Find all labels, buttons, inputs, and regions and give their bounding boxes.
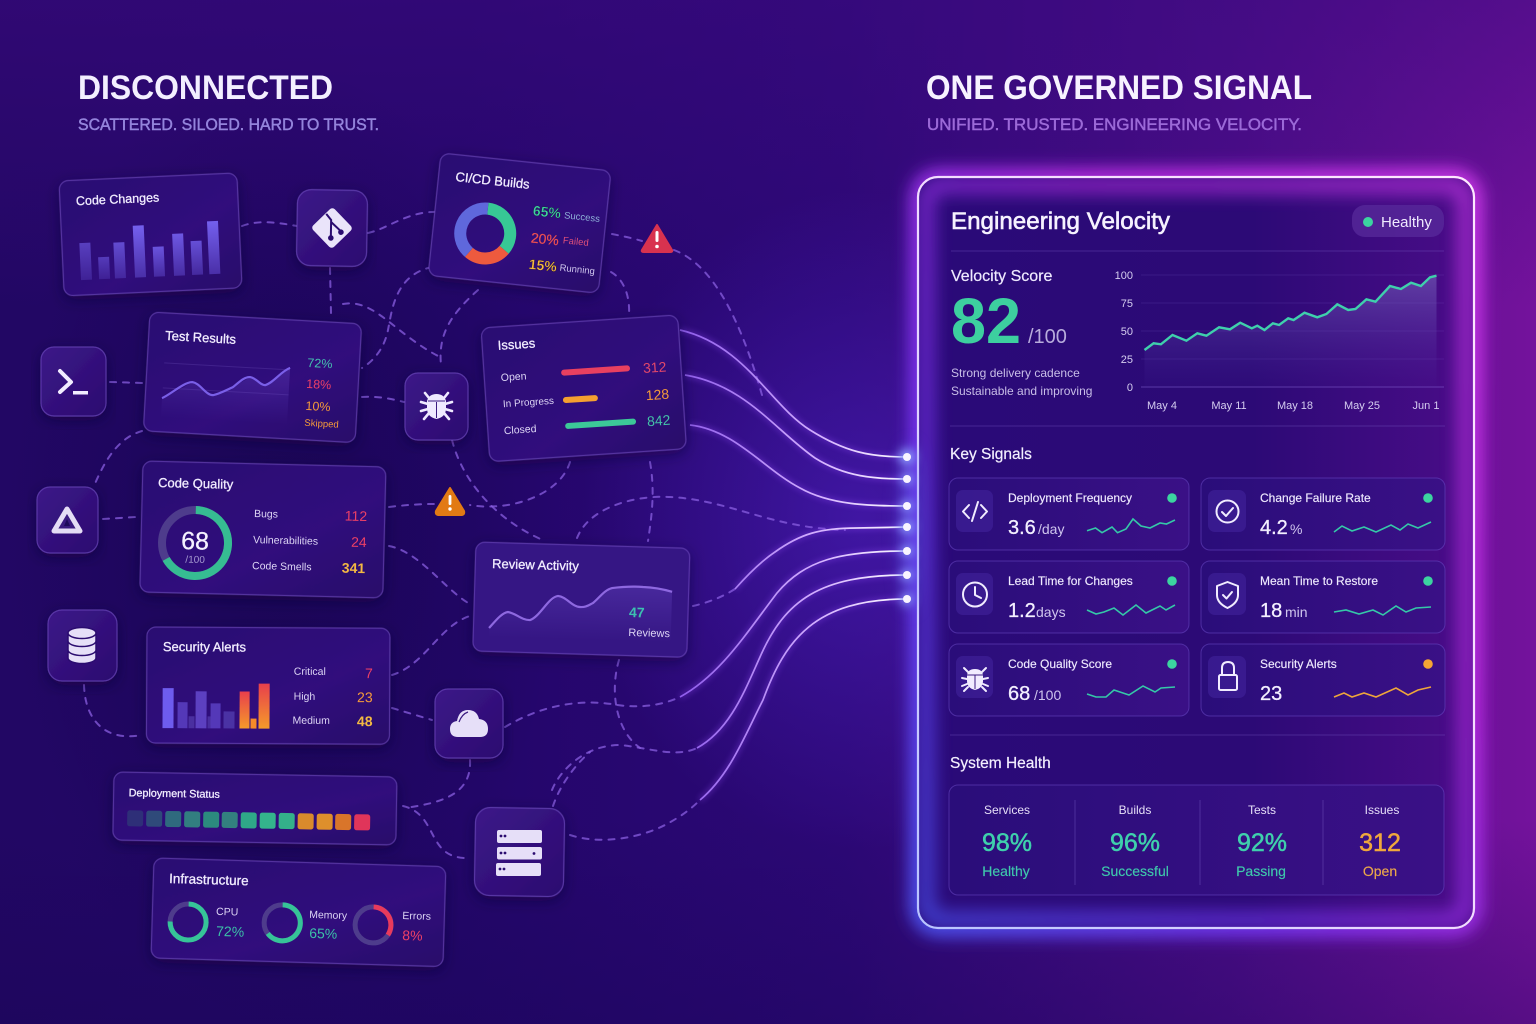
panel: ci/cd builds: CI/CD Builds	[455, 169, 531, 192]
panel: infrastructure: CPU	[216, 906, 238, 919]
panel: issues: Issues	[497, 335, 536, 353]
chart: velocity line: Jun 1	[1413, 400, 1439, 412]
panel: system health: Services	[984, 803, 1030, 817]
chart: velocity line: 50	[1121, 326, 1133, 338]
panel: ci/cd builds: 65%	[532, 202, 562, 221]
panel: infrastructure: Infrastructure	[169, 871, 249, 888]
signal: deployment frequency: 3.6	[1008, 517, 1036, 539]
panel: infrastructure: Memory	[309, 909, 348, 922]
signal: security alerts	[1201, 644, 1445, 716]
panel: infrastructure: 65%	[309, 925, 338, 942]
signal: change failure rate: 4.2	[1260, 517, 1288, 539]
panel: test results: Skipped	[304, 418, 339, 431]
signal: code quality score: /100	[1034, 687, 1061, 703]
velocity score: Velocity Score	[951, 268, 1052, 285]
icon: database	[48, 610, 117, 681]
panel: infrastructure: Errors	[402, 910, 431, 923]
panel: infrastructure	[151, 858, 446, 967]
icon: alert red	[642, 225, 672, 252]
panel: deployment status	[113, 772, 397, 845]
panel: code quality: Vulnerabilities	[253, 534, 318, 548]
icon: cloud	[435, 689, 503, 758]
panel: ci/cd builds: Running	[559, 263, 595, 277]
panel: ci/cd builds: 20%	[530, 230, 560, 248]
signal: mean time to restore: min	[1285, 604, 1308, 620]
panel: system health: 96%	[1110, 829, 1160, 857]
panel: security alerts: Critical	[294, 666, 326, 678]
heading: key signals: Key Signals	[950, 446, 1032, 463]
panel: issues: Open	[500, 370, 527, 384]
signal: deployment frequency: /day	[1038, 521, 1064, 537]
badge: healthy	[1352, 205, 1444, 237]
title: one governed signal	[926, 69, 1312, 134]
icon: triangle	[37, 487, 98, 553]
panel: test results: 72%	[307, 356, 333, 371]
panel: deployment status: Deployment Status	[129, 787, 221, 801]
velocity score: Sustainable and improving	[951, 384, 1092, 398]
panel: code quality: Bugs	[254, 508, 278, 521]
panel: infrastructure: 72%	[216, 923, 244, 940]
panel: test results: Test Results	[165, 328, 237, 347]
converging signal lines	[680, 330, 907, 800]
signal: code quality score: 68	[1008, 683, 1030, 705]
chart: velocity line: May 25	[1344, 400, 1380, 412]
panel: issues: 842	[647, 412, 671, 429]
panel: code quality: 24	[351, 534, 367, 550]
panel: code quality: Code Smells	[252, 560, 312, 574]
panel: security alerts: 7	[365, 665, 373, 681]
icon: alert orange	[436, 488, 464, 515]
icon: git	[296, 189, 368, 267]
chart: velocity line: 100	[1115, 270, 1133, 282]
signal: mean time to restore: Mean Time to Restore	[1260, 574, 1378, 588]
panel: ci/cd builds	[428, 153, 611, 293]
chart: quality gauge	[161, 509, 229, 577]
panel: test results: 10%	[305, 399, 331, 414]
panel: code quality: Code Quality	[158, 475, 234, 492]
panel: security alerts	[146, 627, 390, 744]
panel: code quality: 341	[342, 560, 366, 576]
panel: code quality: /100	[185, 555, 205, 566]
signal: change failure rate: %	[1290, 521, 1302, 537]
signal: lead time for changes	[949, 561, 1189, 633]
signal: lead time for changes: Lead Time for Changes	[1008, 574, 1133, 588]
heading: engineering velocity: Engineering Velocity	[951, 208, 1170, 235]
panel: system health	[949, 785, 1444, 895]
panel: system health: Healthy	[982, 863, 1030, 879]
panel: security alerts: High	[294, 691, 315, 703]
panel: code changes: Code Changes	[76, 190, 160, 208]
panel: system health: 312	[1359, 829, 1401, 857]
panel: security alerts: Security Alerts	[163, 639, 247, 655]
velocity score: 82	[951, 285, 1021, 357]
signal: mean time to restore: 18	[1260, 600, 1282, 622]
signal: change failure rate	[1201, 478, 1445, 550]
signal: lead time for changes: days	[1036, 604, 1066, 620]
panel: code quality: 68	[181, 527, 209, 556]
title: one governed signal: UNIFIED. TRUSTED. ENGINEERING VELOCITY.	[927, 115, 1302, 134]
panel: system health: Issues	[1365, 803, 1399, 817]
panel: review activity	[473, 542, 690, 657]
chart: velocity line: 25	[1121, 354, 1133, 366]
title: disconnected	[78, 69, 379, 134]
dashed connectors between sources	[84, 212, 845, 858]
signal: security alerts: 23	[1260, 683, 1282, 705]
icon: bug	[405, 373, 468, 440]
panel: system health: Passing	[1236, 863, 1286, 879]
panel: security alerts: 48	[357, 713, 373, 729]
panel: ci/cd builds: 15%	[528, 256, 558, 275]
signal: deployment frequency	[949, 478, 1189, 550]
panel: review activity: Reviews	[628, 627, 671, 640]
title: disconnected: DISCONNECTED	[78, 69, 333, 107]
title: one governed signal: ONE GOVERNED SIGNAL	[926, 69, 1312, 107]
chart: velocity line: May 11	[1211, 400, 1247, 412]
panel: system health: Tests	[1248, 803, 1276, 817]
heading: system health: System Health	[950, 755, 1051, 772]
panel: engineering velocity	[918, 177, 1474, 928]
panel: system health: 92%	[1237, 829, 1287, 857]
chart: build donut	[458, 206, 513, 261]
badge: healthy: Healthy	[1381, 214, 1432, 231]
panel: issues: Closed	[503, 423, 537, 437]
panel: system health: 98%	[982, 829, 1032, 857]
signal nodes	[899, 442, 920, 612]
panel: system health: Builds	[1119, 803, 1151, 817]
title: disconnected: SCATTERED. SILOED. HARD TO TRUST.	[78, 115, 379, 134]
chart: velocity line: May 4	[1147, 400, 1177, 412]
panel: test results: 18%	[306, 377, 332, 392]
panel: issues	[481, 315, 686, 462]
velocity score: Strong delivery cadence	[951, 366, 1080, 380]
velocity score	[951, 268, 1092, 398]
signal: change failure rate: Change Failure Rate	[1260, 491, 1371, 505]
panel: code quality: 112	[345, 508, 368, 524]
icon: terminal	[41, 347, 106, 416]
signal: code quality score	[949, 644, 1189, 716]
panel: security alerts: Medium	[292, 715, 330, 727]
signal: lead time for changes: 1.2	[1008, 600, 1036, 622]
chart: velocity line	[1115, 270, 1444, 412]
icon: server	[474, 807, 565, 897]
panel: issues: 312	[642, 359, 667, 376]
panel: infrastructure: 8%	[402, 927, 423, 944]
velocity score: /100	[1028, 326, 1067, 348]
panel: issues: 128	[645, 386, 670, 403]
signal: deployment frequency: Deployment Frequency	[1008, 491, 1132, 505]
panel: review activity: 47	[629, 604, 645, 620]
chart: velocity line: 0	[1127, 382, 1133, 394]
panel: security alerts: 23	[357, 689, 373, 705]
signal: security alerts: Security Alerts	[1260, 657, 1337, 671]
panel: system health: Open	[1363, 863, 1397, 879]
signal: code quality score: Code Quality Score	[1008, 657, 1112, 671]
panel: ci/cd builds: Failed	[562, 235, 589, 249]
signal: mean time to restore	[1201, 561, 1445, 633]
panel: code changes	[59, 173, 242, 296]
panel: issues: In Progress	[503, 396, 554, 410]
panel: code quality	[140, 461, 386, 598]
chart: velocity line: 75	[1121, 298, 1133, 310]
panel: system health: Successful	[1101, 863, 1169, 879]
chart: deployment squares	[127, 810, 370, 830]
panel: review activity: Review Activity	[492, 556, 580, 574]
chart: velocity line: May 18	[1277, 400, 1313, 412]
panel: ci/cd builds: Success	[564, 210, 601, 225]
panel: test results	[143, 312, 362, 443]
